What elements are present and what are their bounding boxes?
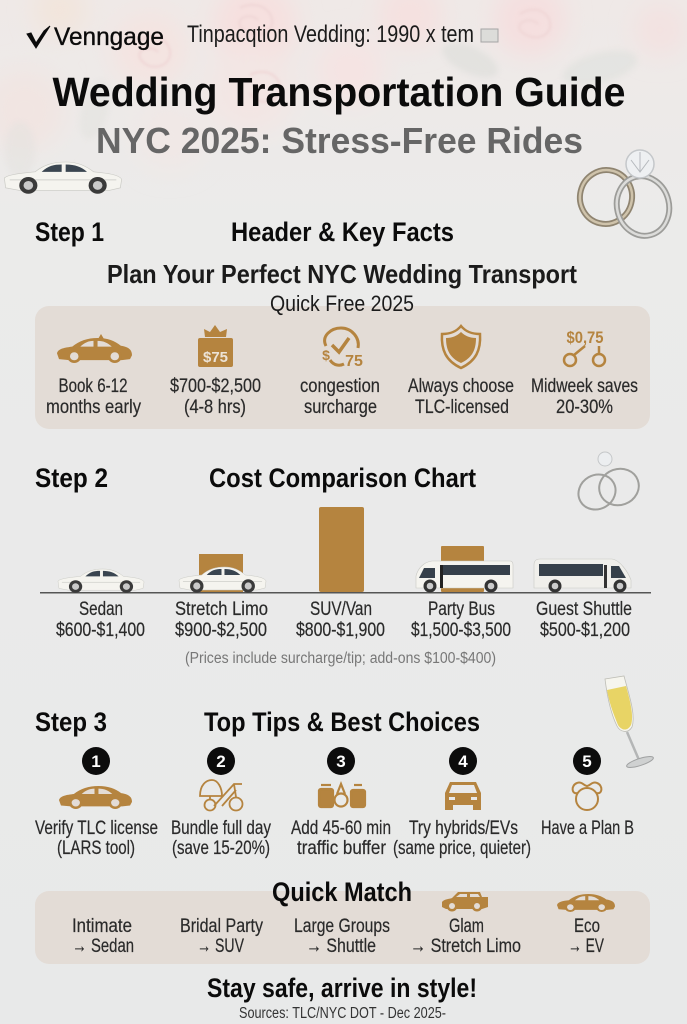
subtitle: NYC 2025: Stress-Free Rides (96, 120, 583, 161)
icon: eco car (557, 894, 615, 912)
vehicle: guest shuttle (534, 559, 631, 592)
match: eco (568, 916, 604, 957)
heading: step 3 (35, 707, 480, 737)
heading: step 3: Step 3 (35, 707, 107, 737)
fact: price range: (4-8 hrs) (184, 397, 246, 418)
label: SUV/van (296, 599, 385, 641)
fact: midweek savings: Midweek saves (531, 376, 638, 397)
match: eco: Eco (574, 916, 600, 937)
label: stretch limo: $900-$2,500 (175, 620, 267, 641)
match: bridal party (180, 916, 263, 957)
heading: step 1: Step 1 (35, 217, 104, 247)
tip 4: Try hybrids/EVs (409, 818, 518, 839)
fact: book early (46, 334, 141, 418)
fact: price range (170, 325, 261, 418)
match: glam (410, 916, 521, 957)
label: party bus: $1,500-$3,500 (411, 620, 511, 641)
tip 2: (save 15-20%) (172, 838, 270, 859)
vehicle: stretch limo (179, 567, 266, 593)
label: sedan (56, 599, 145, 641)
fact: price range: $700-$2,500 (170, 376, 261, 397)
tip 2 (171, 747, 271, 859)
tip 5 (541, 747, 634, 839)
fact: congestion surcharge (300, 328, 380, 418)
label: sedan: Sedan (79, 599, 123, 620)
fact: TLC-licensed shield: Always choose (408, 376, 514, 397)
fact: book early: Book 6-12 (58, 376, 128, 397)
tip 3 (291, 747, 391, 859)
tip 2: 2 (216, 752, 226, 771)
tip 3: traffic buffer (297, 838, 387, 859)
heading: step 2: Cost Comparison Chart (209, 463, 476, 493)
label: SUV/van: SUV/Van (310, 599, 372, 620)
fact: TLC-licensed shield (408, 326, 514, 418)
section subheading: Quick Free 2025 (270, 291, 414, 316)
heading: step 1: Header & Key Facts (231, 217, 454, 247)
heading: step 3: Top Tips & Best Choices (204, 707, 480, 737)
section heading: Plan Your Perfect NYC Wedding Transport (107, 259, 577, 289)
bar: party bus (441, 546, 484, 592)
fact: midweek savings (531, 328, 638, 418)
tip 1: (LARS tool) (57, 838, 135, 859)
fact: TLC-licensed shield: TLC-licensed (415, 397, 509, 418)
heading: step 1 (35, 217, 454, 247)
tip 1 (35, 747, 158, 859)
fact: congestion surcharge: 75 (345, 353, 363, 370)
match: intimate: → Sedan (72, 936, 134, 957)
sources: Sources: TLC/NYC DOT - Dec 2025- (239, 1005, 446, 1022)
fact: congestion surcharge: $ (322, 347, 330, 363)
icon: glam car (442, 892, 488, 912)
illustration: champagne flute (605, 676, 654, 770)
illustration: white sedan (4, 162, 122, 194)
match: large groups: Large Groups (294, 916, 390, 937)
heading: step 2: Step 2 (35, 463, 108, 493)
match: glam: Glam (449, 916, 484, 937)
match: glam: → Stretch Limo (410, 936, 521, 957)
tip 4 (393, 747, 531, 859)
label: sedan: $600-$1,400 (56, 620, 145, 641)
heading: quick match: Quick Match (272, 877, 412, 907)
tip 2: Bundle full day (171, 818, 271, 839)
title: Wedding Transportation Guide (52, 69, 626, 115)
tip 1: Verify TLC license (35, 818, 158, 839)
fact: book early: months early (46, 397, 141, 418)
tip 3: 3 (336, 752, 346, 771)
panel: key facts (35, 291, 650, 429)
panel: quick match (35, 877, 650, 964)
label: stretch limo: Stretch Limo (175, 599, 268, 620)
floral background (0, 0, 686, 178)
tip 5: Have a Plan B (541, 818, 634, 839)
fact: midweek savings: 20-30% (556, 397, 613, 418)
logo: Venngage: Venngage (54, 23, 164, 51)
bar chart: cost comparison (40, 507, 651, 641)
heading: step 2 (35, 463, 476, 493)
match: bridal party: → SUV (197, 936, 244, 957)
tip 3: Add 45-60 min (291, 818, 391, 839)
tip 5: 5 (582, 752, 592, 771)
tip 4: (same price, quieter) (393, 838, 531, 859)
match: bridal party: Bridal Party (180, 916, 263, 937)
fact: congestion surcharge: surcharge (304, 397, 377, 418)
illustration: rings (572, 452, 644, 516)
header tagline: Tinpacqtion Vedding: 1990 x tem (187, 21, 474, 48)
closing message: Stay safe, arrive in style! (207, 973, 477, 1003)
chart axis (40, 592, 651, 594)
vehicle: sedan (58, 569, 144, 593)
fact: midweek savings: $0,75 (566, 328, 604, 347)
vehicle: party bus (416, 561, 513, 592)
label: guest shuttle: Guest Shuttle (536, 599, 632, 620)
tip 1: 1 (91, 752, 101, 771)
match: intimate (72, 916, 134, 957)
illustration: wedding rings (574, 150, 675, 241)
chart footnote: (Prices include surcharge/tip; add-ons $100-$400) (185, 650, 496, 667)
match: intimate: Intimate (72, 916, 132, 937)
bar: SUV/van (319, 507, 364, 592)
fact: price range: $75 (203, 349, 228, 366)
fact: congestion surcharge: congestion (300, 376, 380, 397)
bar: stretch limo (199, 554, 243, 592)
label: guest shuttle (536, 599, 632, 641)
label: party bus: Party Bus (428, 599, 495, 620)
label: SUV/van: $800-$1,900 (296, 620, 385, 641)
tip 4: 4 (458, 752, 468, 771)
match: eco: → EV (568, 936, 604, 957)
match: large groups (294, 916, 390, 957)
label: guest shuttle: $500-$1,200 (540, 620, 630, 641)
label: stretch limo (175, 599, 268, 641)
label: party bus (411, 599, 511, 641)
match: large groups: → Shuttle (306, 936, 376, 957)
